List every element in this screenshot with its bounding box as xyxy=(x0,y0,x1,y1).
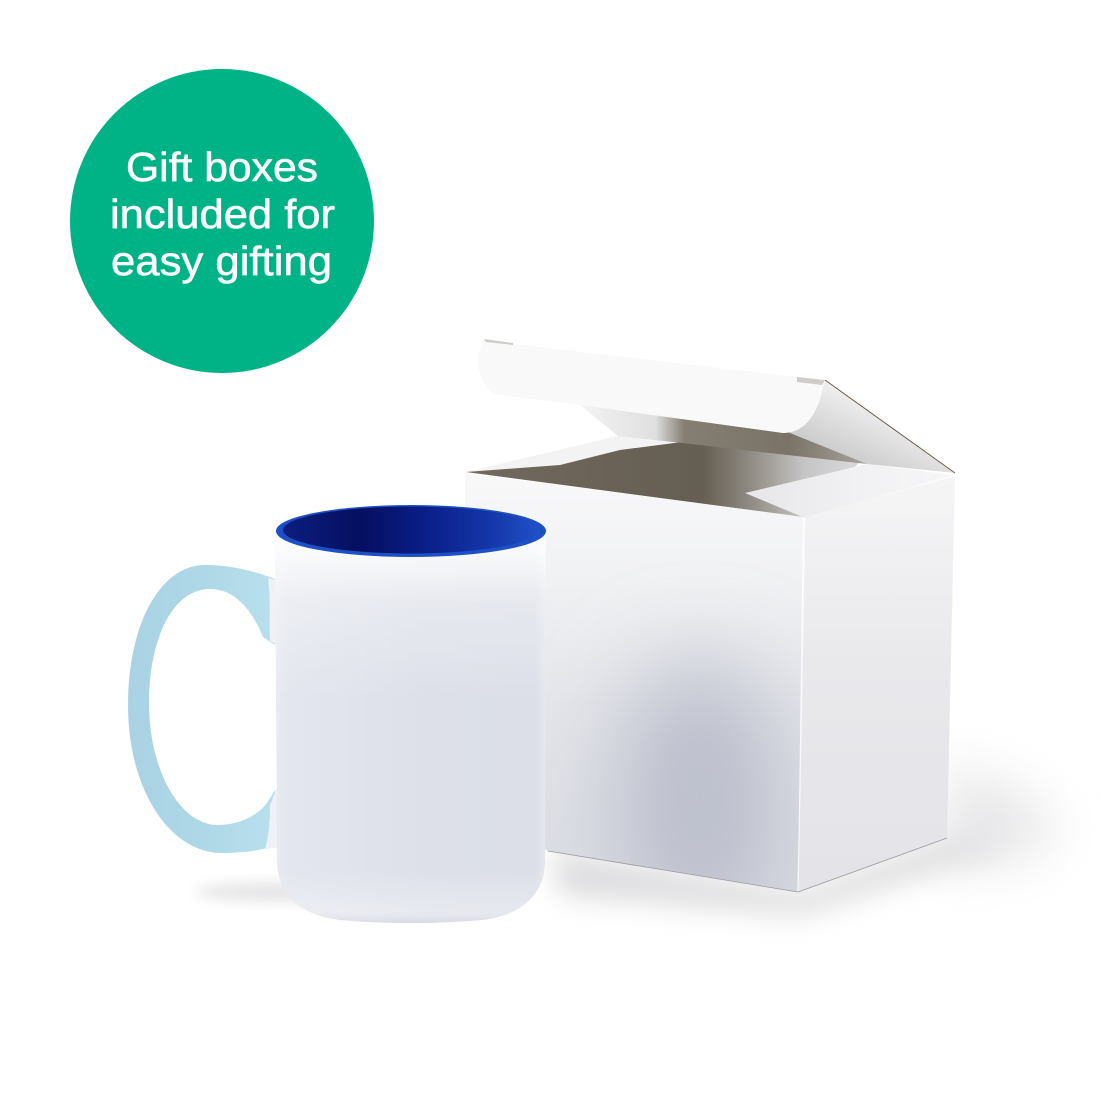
lid tab right xyxy=(797,377,825,385)
box left inner flap xyxy=(466,436,682,472)
mug handle xyxy=(128,565,275,853)
box right face xyxy=(795,470,960,900)
box right inner flap xyxy=(745,464,954,518)
gift box xyxy=(460,339,960,940)
lid side wedge xyxy=(785,380,955,473)
badge circle xyxy=(70,69,374,373)
box interior xyxy=(466,440,860,517)
lid tab left xyxy=(484,339,513,345)
mug xyxy=(128,505,546,923)
mug body highlight xyxy=(275,531,546,923)
badge text xyxy=(110,144,335,284)
badge text: included for xyxy=(110,191,335,237)
mug interior xyxy=(283,506,539,554)
badge text: Gift boxes xyxy=(126,144,318,190)
lid edge xyxy=(825,380,955,473)
box front face xyxy=(465,493,803,892)
badge text: easy gifting xyxy=(111,238,332,284)
handle upper joint xyxy=(268,578,277,645)
box corner edge xyxy=(798,518,805,892)
lid flap xyxy=(478,340,825,433)
handle lower joint xyxy=(265,788,277,849)
mug rim xyxy=(276,505,546,557)
mug body xyxy=(275,531,546,923)
box base edge xyxy=(548,838,947,892)
floor shadows xyxy=(195,760,1050,915)
product illustration: mug and gift box xyxy=(128,339,1052,924)
lid underside xyxy=(580,405,867,464)
